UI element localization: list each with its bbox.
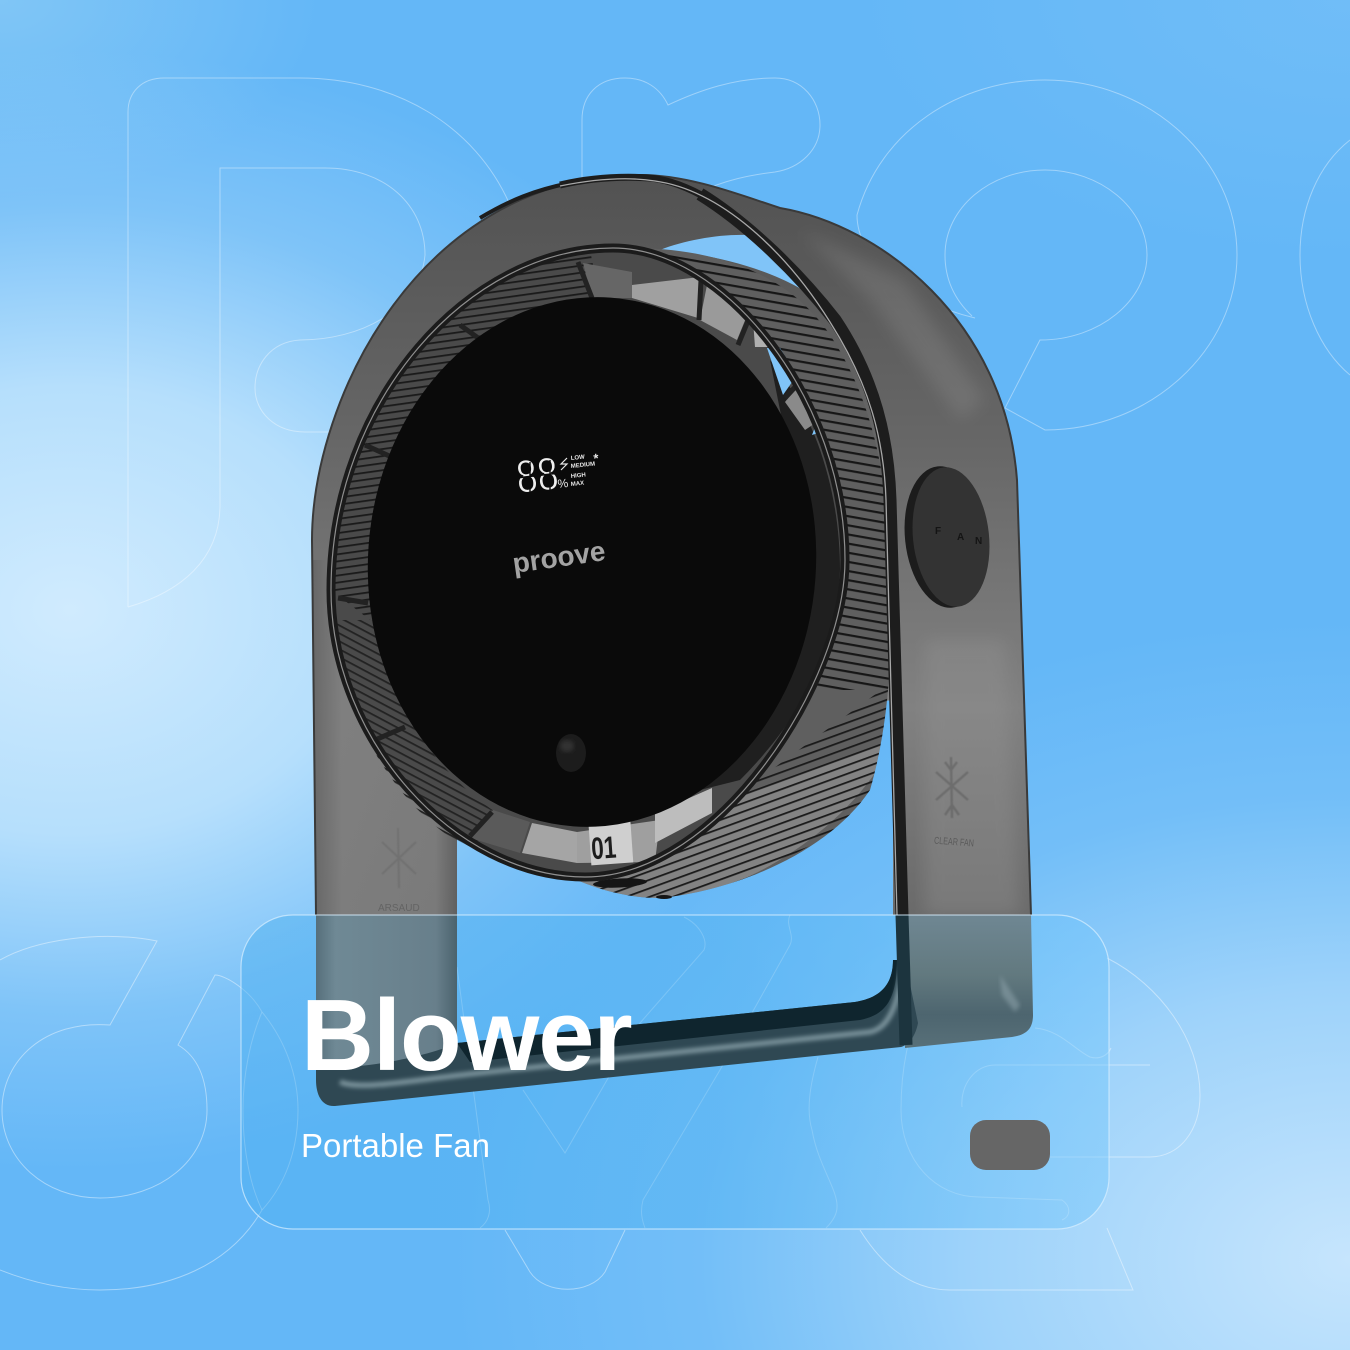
power button — [556, 734, 586, 772]
outline lettering: top row — [128, 78, 1350, 607]
logo: proove — [511, 535, 607, 579]
subtitle: Portable Fan — [301, 1127, 490, 1164]
rim tinted — [902, 915, 906, 1045]
display digits: 88 — [514, 447, 561, 503]
display percent sign: % — [557, 476, 569, 491]
mode labels: MAX — [571, 481, 584, 488]
mode labels — [571, 455, 595, 488]
drum body — [580, 249, 889, 899]
bottom bar tinted — [316, 960, 918, 1106]
grille fins — [470, 263, 818, 863]
right snowflake — [936, 757, 968, 818]
display icon: bolt — [561, 458, 567, 470]
stand seen through glass — [316, 915, 1033, 1106]
bar highlight — [340, 960, 903, 1085]
panel outline — [241, 915, 1109, 1229]
knob with FAN label: A — [957, 532, 964, 543]
glass panel — [241, 915, 1109, 1229]
stand body — [312, 175, 1031, 915]
drum underside port — [593, 877, 647, 889]
black disc — [350, 282, 834, 842]
mode labels: MEDIUM — [571, 461, 595, 470]
number tag 01 — [588, 821, 633, 866]
right foot tinted — [905, 915, 1033, 1048]
number tag 01: 01 — [590, 830, 617, 866]
fan product — [312, 175, 1031, 915]
display icon: frost: * — [593, 450, 600, 466]
left snowflake — [382, 828, 416, 888]
stand outer edge — [312, 175, 1031, 915]
knob with FAN label: F — [935, 526, 941, 537]
mode labels: LOW — [571, 455, 585, 462]
knob with FAN label: N — [975, 536, 982, 547]
sky crescent behind arch — [660, 235, 827, 307]
front ring — [331, 248, 845, 877]
right band caption: CLEAR FAN — [934, 836, 974, 849]
mode labels: HIGH — [571, 472, 586, 480]
dark inner shadow on right of grille — [700, 360, 840, 790]
left leg caption: ARSAUD — [378, 903, 420, 914]
front rim of stand — [480, 177, 902, 915]
left leg tinted — [316, 915, 457, 1080]
left leg shading — [313, 560, 457, 915]
grille spokes — [338, 262, 797, 836]
title: Blower — [301, 980, 632, 1092]
knob with FAN label — [898, 462, 996, 612]
grey pill — [970, 1120, 1050, 1170]
foot highlight — [1000, 975, 1020, 1012]
outline lettering: bottom row — [0, 915, 1200, 1290]
bar shadow band — [457, 960, 897, 1062]
display notches — [516, 460, 560, 496]
right band shading — [925, 640, 1020, 915]
grille inside ring — [331, 248, 845, 877]
